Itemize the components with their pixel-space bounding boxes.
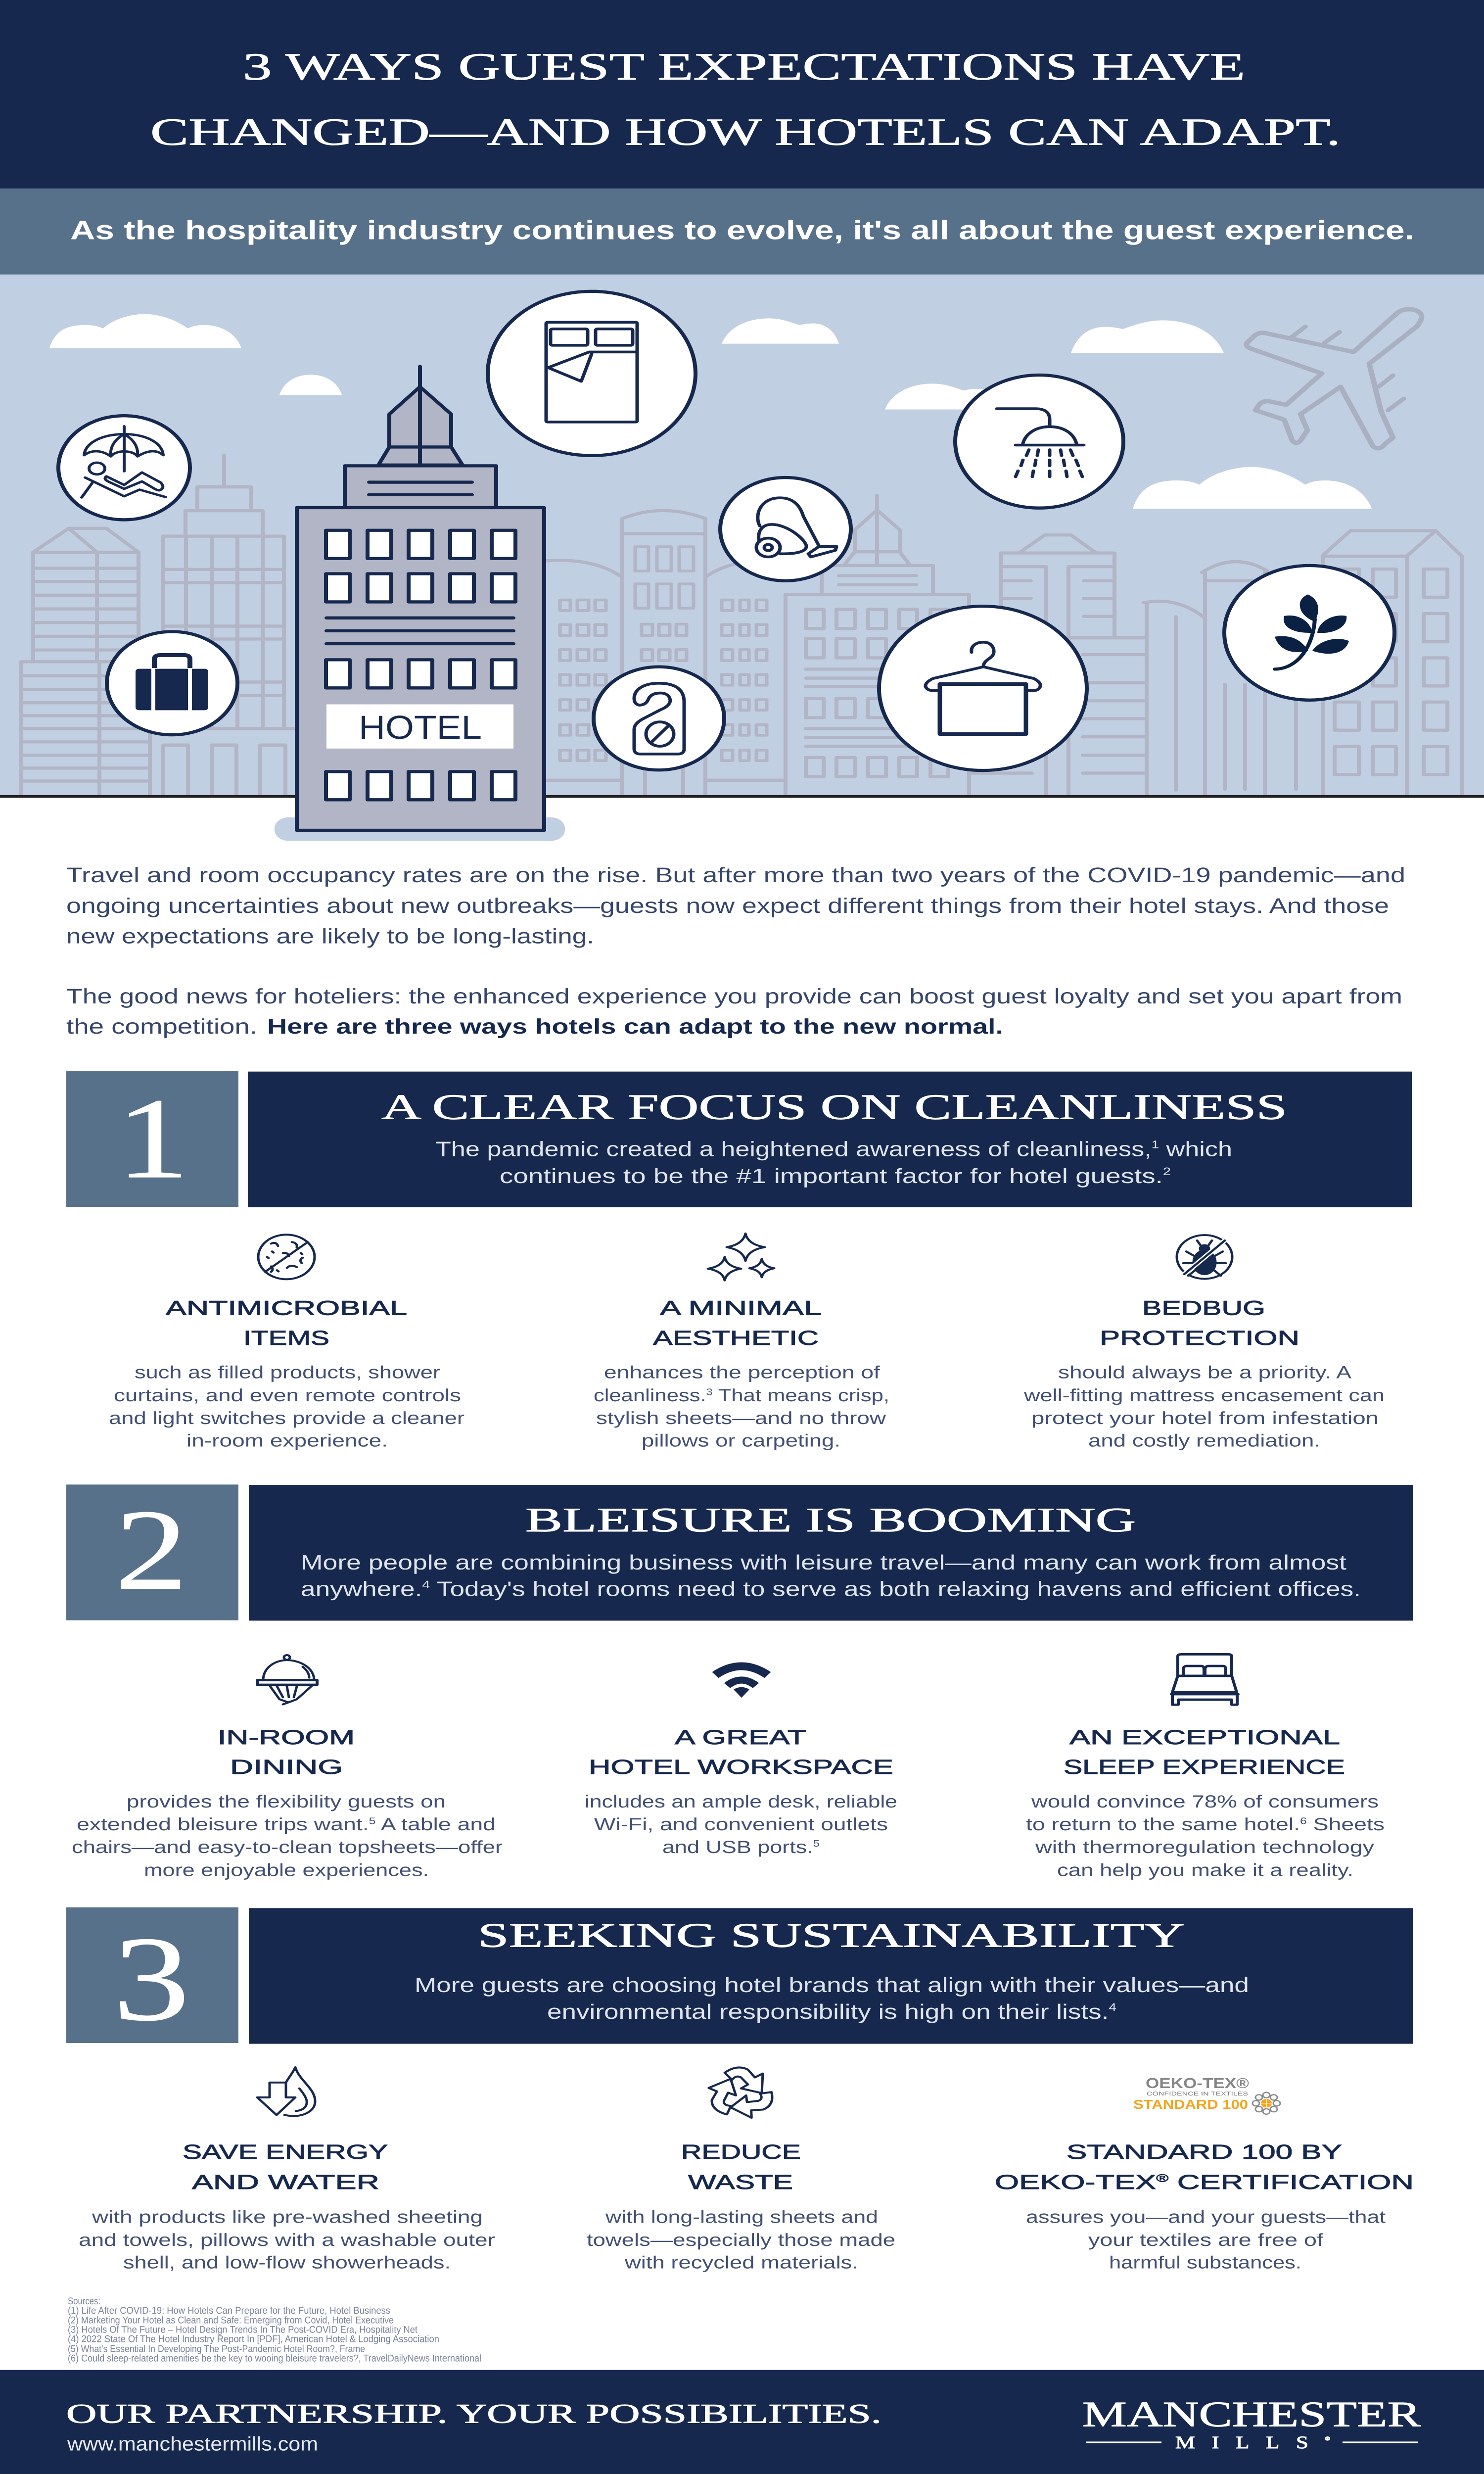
item: standard 100 by oeko-tex certification: your textiles are free of	[1088, 2230, 1324, 2250]
icon: towel on hanger in circle	[879, 606, 1087, 770]
item: save energy and water: shell, and low-flow showerheads.	[123, 2252, 451, 2272]
item: an exceptional sleep experience: SLEEP EXPERIENCE	[1064, 1756, 1345, 1779]
header: a clear focus on cleanliness: 2	[1163, 1165, 1171, 1178]
intro paragraphs: new expectations are likely to be long-lasting.	[66, 924, 594, 948]
item: reduce waste: REDUCE	[681, 2141, 801, 2163]
item: antimicrobial items: and light switches provide a cleaner	[109, 1408, 464, 1428]
item: standard 100 by oeko-tex certification: harmful substances.	[1109, 2252, 1301, 2272]
sources list: (6) Could sleep-related amenities be the key to wooing bleisure travelers?, TravelDailyNews International	[68, 2353, 481, 2364]
item: in-room dining: chairs—and easy-to-clean topsheets—offer	[72, 1837, 503, 1857]
footer: www.manchestermills.com	[67, 2433, 318, 2455]
item: save energy and water: with products like pre-washed sheeting	[92, 2207, 483, 2227]
subtitle band: As the hospitality industry continues to evolve, it's all about the guest experience.	[70, 216, 1414, 245]
sources list: (5) What's Essential In Developing The Post-Pandemic Hotel Room?, Frame	[68, 2343, 365, 2354]
number badge 3: 3	[113, 1912, 190, 2046]
item: a great hotel workspace: includes an ample desk, reliable	[585, 1792, 897, 1811]
item: reduce waste	[587, 2067, 895, 2272]
intro paragraphs: ongoing uncertainties about new outbreaks—guests now expect different things from their hotel stays. And those	[66, 894, 1389, 917]
logo: manchester mills: ®	[1325, 2436, 1330, 2442]
sources list: (1) Life After COVID-19: How Hotels Can Prepare for the Future, Hotel Business	[68, 2305, 390, 2316]
header: bleisure is booming: anywhere.	[301, 1577, 422, 1601]
item: a minimal aesthetic: 3	[706, 1387, 713, 1397]
item: a minimal aesthetic: pillows or carpeting.	[642, 1430, 840, 1451]
item: antimicrobial items	[109, 1235, 464, 1451]
item: bedbug protection: well-fitting mattress encasement can	[1023, 1385, 1385, 1405]
item: antimicrobial items: such as filled products, shower	[135, 1362, 440, 1382]
item: save energy and water: SAVE ENERGY	[183, 2141, 388, 2163]
item: an exceptional sleep experience: with thermoregulation technology	[1035, 1837, 1375, 1857]
sources list: (3) Hotels Of The Future – Hotel Design Trends In The Post-COVID Era, Hospitality Net	[68, 2324, 417, 2335]
header: a clear focus on cleanliness: A CLEAR FOCUS ON CLEANLINESS	[381, 1087, 1287, 1127]
header: bleisure is booming: More people are combining business with leisure travel—and many can work from almost	[301, 1551, 1346, 1574]
item: antimicrobial items: in-room experience.	[186, 1430, 388, 1451]
item: a minimal aesthetic: AESTHETIC	[653, 1327, 819, 1350]
item: a minimal aesthetic: A MINIMAL	[660, 1297, 822, 1320]
header: bleisure is booming: 4	[422, 1578, 430, 1591]
sources list: (4) 2022 State Of The Hotel Industry Report In [PDF], American Hotel & Lodging Association	[68, 2333, 439, 2344]
ground line	[0, 795, 1484, 798]
title banner	[0, 0, 1484, 189]
item: standard 100 by oeko-tex certification: STANDARD 100 BY	[1067, 2141, 1342, 2163]
item: an exceptional sleep experience: can help you make it a reality.	[1057, 1860, 1353, 1880]
header: bleisure is booming	[249, 1485, 1413, 1620]
item: standard 100 by oeko-tex certification: OEKO-TEX	[995, 2171, 1128, 2193]
logo: manchester mills: MANCHESTER	[1082, 2394, 1421, 2434]
item: standard 100 by oeko-tex certification	[995, 2075, 1414, 2272]
item: a great hotel workspace: A GREAT	[675, 1726, 806, 1749]
item: bedbug protection: protect your hotel from infestation	[1031, 1408, 1379, 1428]
item: an exceptional sleep experience: Sheets	[1307, 1814, 1385, 1834]
title banner: CHANGED—AND HOW HOTELS CAN ADAPT.	[150, 111, 1341, 153]
icon: shower in circle	[955, 375, 1123, 508]
icon: microbes crossed out	[258, 1235, 315, 1279]
skyline buildings	[21, 455, 1462, 796]
item: a minimal aesthetic: enhances the perception of	[604, 1362, 881, 1382]
number badge 1: 1	[116, 1074, 189, 1202]
hotel building	[297, 367, 544, 830]
item: antimicrobial items: ANTIMICROBIAL	[166, 1297, 407, 1320]
item: a minimal aesthetic	[594, 1234, 889, 1451]
icon: cloche on hand	[257, 1655, 317, 1705]
header: seeking sustainability	[249, 1908, 1413, 2044]
sources list: Sources:	[68, 2296, 100, 2307]
icon: wifi	[715, 1666, 768, 1698]
icon: vacuum cleaner in circle	[720, 477, 851, 581]
panel 1: cleanliness	[66, 1071, 1412, 1451]
item: a great hotel workspace: and USB ports.	[662, 1837, 813, 1857]
item: an exceptional sleep experience: would convince 78% of consumers	[1031, 1792, 1379, 1811]
icon: recycle arrows	[702, 2067, 777, 2121]
item: a great hotel workspace: 5	[813, 1839, 820, 1849]
header: a clear focus on cleanliness	[248, 1072, 1412, 1207]
sources list: (2) Marketing Your Hotel as Clean and Safe: Emerging from Covid, Hotel Executive	[68, 2315, 394, 2326]
intro paragraphs: Here are three ways hotels can adapt to the new normal.	[267, 1015, 1003, 1038]
footer: OUR PARTNERSHIP. YOUR POSSIBILITIES.	[66, 2399, 881, 2429]
item: an exceptional sleep experience: 6	[1300, 1816, 1307, 1826]
panel 2: bleisure	[66, 1484, 1413, 1880]
header: seeking sustainability: 4	[1109, 2001, 1116, 2013]
item: in-room dining: provides the flexibility guests on	[127, 1792, 446, 1811]
icon: water drop with down arrow	[257, 2067, 315, 2116]
icon: crossed out bedbug	[1177, 1235, 1232, 1279]
icon: sparkles	[708, 1234, 774, 1281]
icon: suitcase in circle	[107, 631, 237, 735]
header: seeking sustainability: SEEKING SUSTAINABILITY	[478, 1917, 1185, 1954]
item: reduce waste: towels—especially those made	[587, 2230, 895, 2250]
item: reduce waste: with long-lasting sheets and	[605, 2207, 878, 2227]
item: antimicrobial items: ITEMS	[243, 1327, 329, 1350]
panel 3: sustainability	[66, 1907, 1414, 2272]
sources list	[68, 2296, 481, 2364]
hotel building: HOTEL	[359, 709, 482, 746]
item: bedbug protection: PROTECTION	[1100, 1327, 1299, 1350]
intro paragraphs: Travel and room occupancy rates are on the rise. But after more than two years of the COVID-19 pandemic—and	[66, 863, 1405, 887]
logo: manchester mills	[1082, 2394, 1421, 2452]
item: standard 100 by oeko-tex certification: ®	[1156, 2172, 1169, 2184]
item: in-room dining: IN-ROOM	[218, 1726, 355, 1749]
item: bedbug protection: should always be a priority. A	[1058, 1362, 1351, 1382]
number badge 2	[66, 1484, 238, 1620]
item: a great hotel workspace	[585, 1666, 897, 1857]
title banner: 3 WAYS GUEST EXPECTATIONS HAVE	[243, 46, 1245, 88]
icon: leaf branch in circle	[1224, 566, 1394, 700]
item: an exceptional sleep experience: AN EXCEPTIONAL	[1069, 1726, 1340, 1749]
item: an exceptional sleep experience	[1026, 1654, 1385, 1880]
header: a clear focus on cleanliness: The pandemic created a heightened awareness of cleanliness,	[435, 1138, 1162, 1161]
logo: oeko-tex standard 100: OEKO-TEX®	[1146, 2075, 1249, 2091]
item: standard 100 by oeko-tex certification: assures you—and your guests—that	[1026, 2207, 1386, 2227]
logo: oeko-tex standard 100: STANDARD 100	[1133, 2097, 1248, 2111]
number badge 1	[66, 1071, 238, 1207]
header: bleisure is booming: Today's hotel rooms need to serve as both relaxing havens and efficient offices.	[430, 1577, 1361, 1601]
number badge 2: 2	[115, 1486, 188, 1614]
icon: bed in circle	[488, 291, 696, 456]
item: in-room dining: more enjoyable experiences.	[144, 1860, 429, 1880]
item: in-room dining: A table and	[375, 1814, 496, 1834]
item: in-room dining: extended bleisure trips want.	[77, 1814, 360, 1834]
icon: bed front view	[1171, 1654, 1238, 1705]
item: standard 100 by oeko-tex certification: CERTIFICATION	[1168, 2171, 1414, 2193]
logo: oeko-tex standard 100	[1133, 2075, 1280, 2114]
number badge 3	[66, 1907, 238, 2046]
header: seeking sustainability: environmental responsibility is high on their lists.	[547, 2000, 1108, 2023]
intro paragraphs	[66, 863, 1405, 1038]
item: save energy and water: AND WATER	[192, 2171, 379, 2193]
item: bedbug protection: and costly remediation.	[1088, 1430, 1320, 1451]
item: save energy and water	[79, 2067, 495, 2272]
item: save energy and water: and towels, pillows with a washable outer	[79, 2230, 495, 2250]
item: a great hotel workspace: Wi-Fi, and convenient outlets	[594, 1814, 888, 1834]
footer	[0, 2370, 1484, 2474]
icon: beach umbrella in circle	[58, 416, 190, 520]
header: a clear focus on cleanliness: 1	[1152, 1139, 1159, 1150]
item: reduce waste: WASTE	[688, 2171, 793, 2193]
intro paragraphs: The good news for hoteliers: the enhanced experience you provide can boost guest loyalty and set you apart from	[66, 985, 1402, 1008]
item: a minimal aesthetic: stylish sheets—and no throw	[596, 1408, 886, 1428]
item: an exceptional sleep experience: to return to the same hotel.	[1026, 1814, 1292, 1834]
subtitle band	[0, 189, 1484, 275]
hotel shadow	[275, 817, 565, 841]
header: a clear focus on cleanliness: continues to be the #1 important factor for hotel guests.	[500, 1165, 1141, 1188]
logo: manchester mills: MILLS	[1175, 2432, 1308, 2452]
header: seeking sustainability: More guests are choosing hotel brands that align with their values—and	[415, 1974, 1249, 1997]
item: antimicrobial items: curtains, and even remote controls	[114, 1385, 461, 1405]
item: in-room dining: 5	[369, 1816, 375, 1826]
item: a minimal aesthetic: That means crisp,	[713, 1385, 889, 1405]
item: in-room dining	[72, 1655, 503, 1880]
item: in-room dining: DINING	[230, 1756, 343, 1779]
icon: airplane	[1247, 309, 1422, 448]
item: reduce waste: with recycled materials.	[624, 2252, 858, 2272]
intro paragraphs: the competition.	[66, 1015, 257, 1038]
item: bedbug protection: BEDBUG	[1142, 1297, 1265, 1320]
item: a minimal aesthetic: cleanliness.	[594, 1385, 710, 1405]
hero illustration: hotel in city skyline	[0, 275, 1484, 841]
header: bleisure is booming: BLEISURE IS BOOMING	[525, 1501, 1136, 1539]
item: a great hotel workspace: HOTEL WORKSPACE	[589, 1756, 893, 1779]
icon: do not disturb door hanger in circle	[594, 667, 724, 770]
header: a clear focus on cleanliness: which	[1159, 1138, 1232, 1161]
item: bedbug protection	[1023, 1235, 1385, 1451]
clouds	[49, 314, 1372, 509]
logo: oeko-tex standard 100: CONFIDENCE IN TEXTILES	[1147, 2091, 1248, 2096]
